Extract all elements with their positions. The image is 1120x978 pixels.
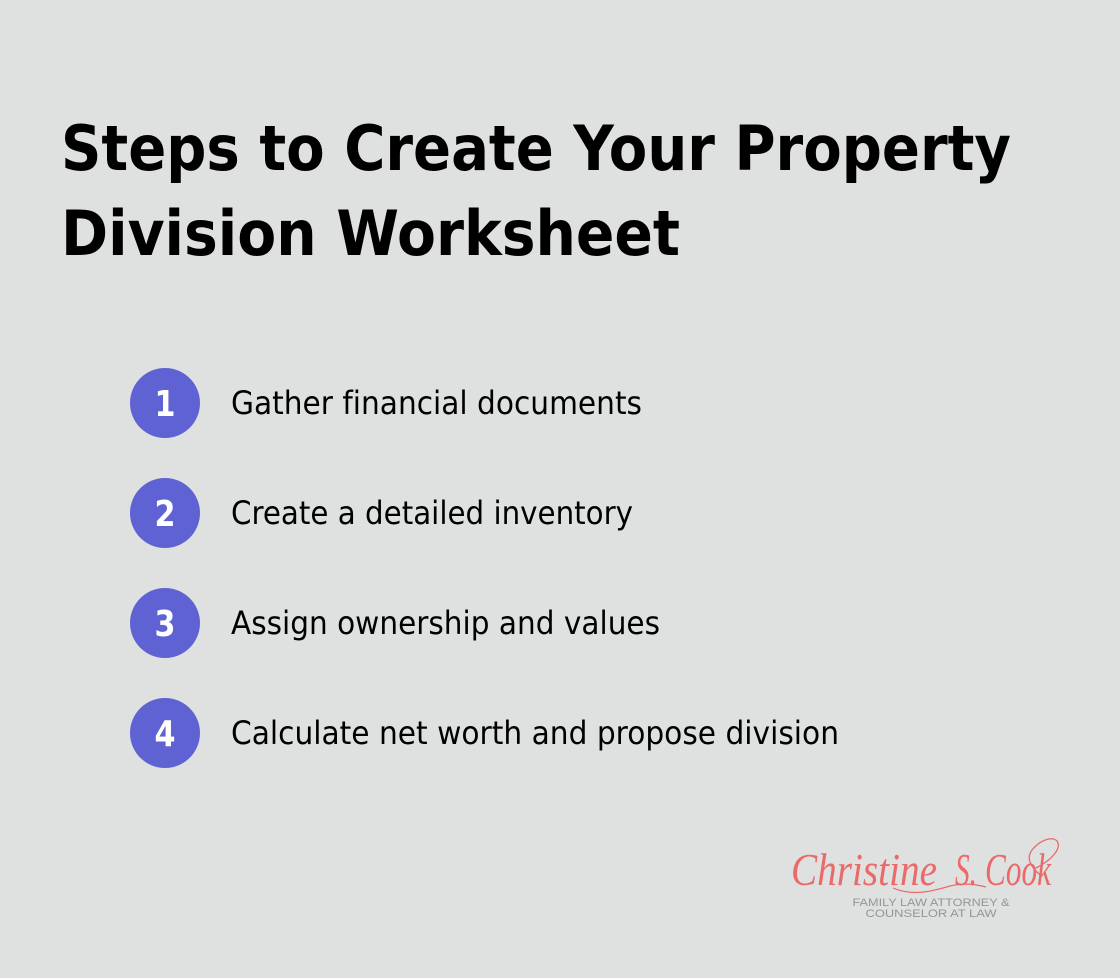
logo: Christine S. Cook: Christine [791,844,937,895]
title: Steps to Create Your Property [61,112,1011,185]
title [61,112,1011,270]
logo: Christine S. Cook: COUNSELOR AT LAW [866,908,997,920]
step 3: Assign ownership and values [231,604,660,642]
steps list [130,368,839,768]
step 1 [130,368,642,438]
step 2: 2 [154,494,176,535]
logo: Christine S. Cook: FAMILY LAW ATTORNEY & [852,897,1010,909]
step 4 [130,698,839,768]
title: Division Worksheet [61,197,680,270]
step 4: Calculate net worth and propose division [231,714,839,752]
logo: Christine S. Cook [791,839,1058,920]
step 1: 1 [154,384,176,425]
step 1: Gather financial documents [231,384,642,422]
step 2 [130,478,633,548]
step 3: 3 [154,604,176,645]
logo: Christine S. Cook: Cook [985,844,1052,895]
step 3 [130,588,660,658]
step 2: Create a detailed inventory [231,494,633,532]
logo: Christine S. Cook: S. [955,844,977,895]
step 4: 4 [154,714,176,755]
